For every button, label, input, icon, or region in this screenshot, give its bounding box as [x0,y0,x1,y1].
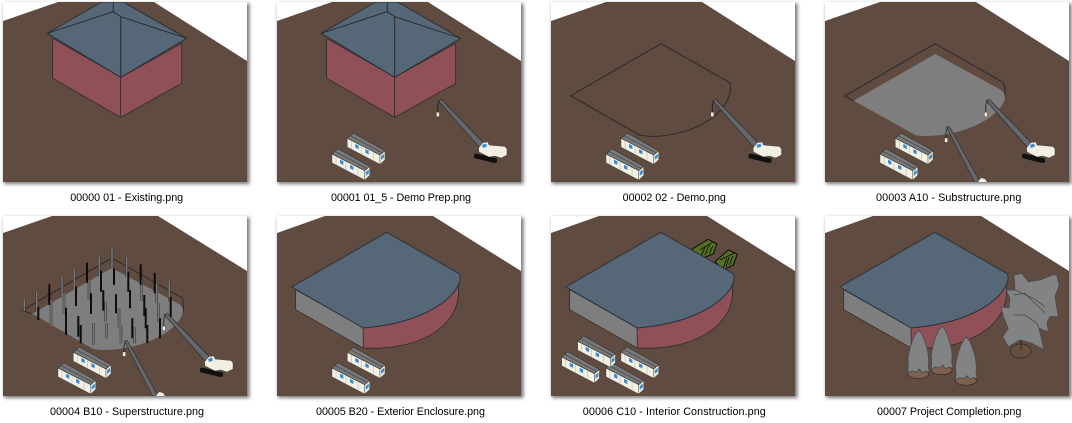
enclosed building [566,232,734,348]
substructure slab [32,268,183,350]
crane two [123,340,165,396]
site trailers [332,133,385,180]
site trailers [880,133,933,180]
panel: 00002 02 - Demo [551,2,798,204]
crane one [162,314,233,377]
panel: 00007 Project Completion [825,216,1072,418]
conifer trees [908,326,977,385]
ground plane [551,2,795,182]
panel: 00003 A10 - Substructure [825,2,1072,204]
crane two [945,126,987,182]
ground plane [277,216,521,396]
site trailers [332,347,385,394]
crane one [984,100,1055,163]
caption: 00001 01_5 - Demo Prep.png [331,192,471,204]
deciduous trees [1001,273,1059,358]
ground plane [277,2,521,182]
caption: 00005 B20 - Exterior Enclosure.png [316,406,485,418]
ground plane [3,216,247,396]
green dumpsters [692,239,737,270]
caption: 00003 A10 - Substructure.png [876,192,1021,204]
excavation outline [845,44,1005,101]
site trailers [606,133,659,180]
existing building [321,2,461,117]
caption: 00007 Project Completion.png [877,406,1021,418]
crane [436,100,507,163]
ground plane [825,216,1069,396]
ground plane [3,2,247,182]
demolished footprint outline [571,44,730,137]
panel: 00006 C10 - Interior Construction [551,216,798,418]
panel: 00000 01 - Existing [3,2,250,204]
caption: 00000 01 - Existing.png [70,192,183,204]
panel: 00001 01_5 - Demo Prep [277,2,524,204]
ground plane [551,216,795,396]
crane [711,100,782,163]
site trailers [562,336,659,394]
site trailers [58,347,111,394]
existing building [47,2,187,117]
panel: 00004 B10 - Superstructure [3,216,250,418]
steel columns [24,248,171,345]
excavation outline [23,258,183,314]
panel: 00005 B20 - Exterior Enclosure [277,216,524,418]
ground plane [825,2,1069,182]
substructure slab [854,54,1005,136]
caption: 00002 02 - Demo.png [623,192,726,204]
caption: 00006 C10 - Interior Construction.png [583,406,766,418]
caption: 00004 B10 - Superstructure.png [50,406,204,418]
completed building [840,232,1008,348]
enclosed building [292,232,460,348]
